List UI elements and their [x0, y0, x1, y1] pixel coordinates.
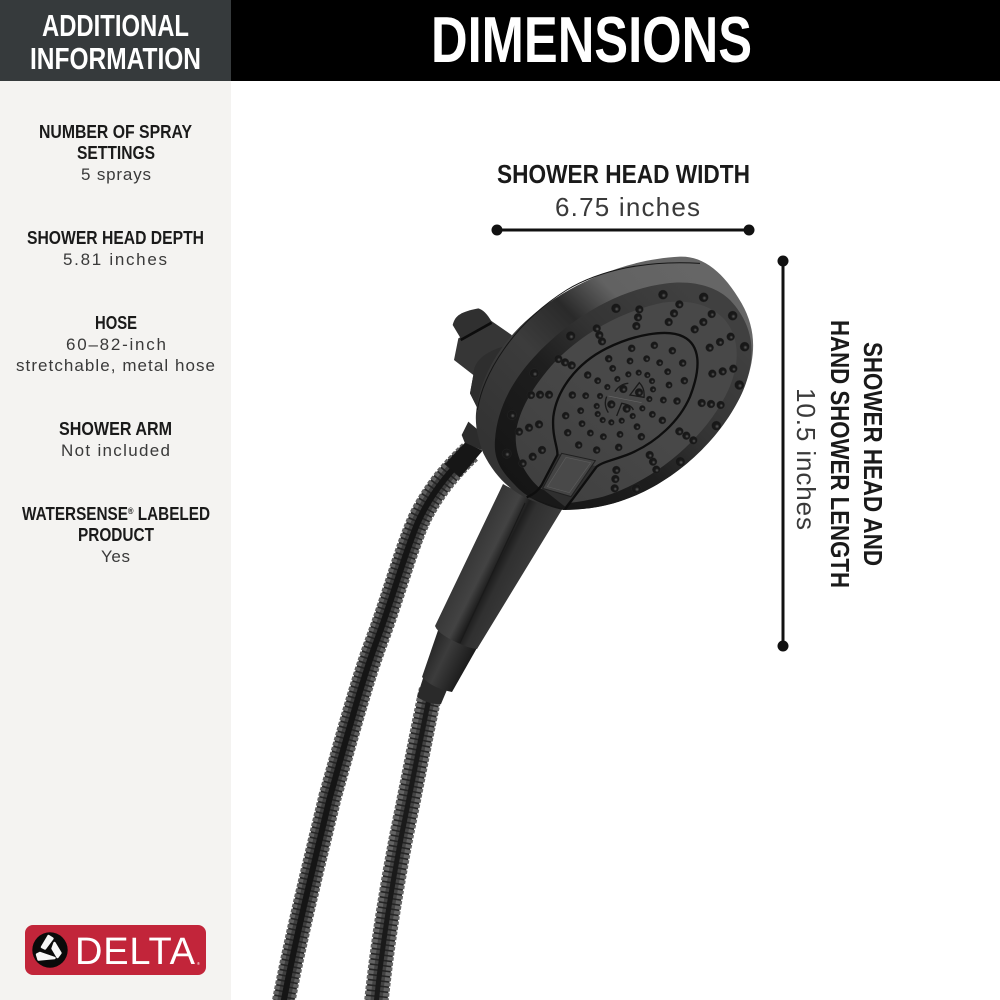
spec: watersense labeled product — [22, 504, 210, 566]
spec: number of spray settings: 5 sprays — [81, 165, 151, 184]
hose neck — [417, 672, 452, 704]
spec: shower head depth: SHOWER HEAD DEPTH — [27, 228, 204, 248]
label: shower head and hand shower length: SHOWER HEAD AND — [858, 342, 888, 566]
sidebar panel background — [0, 81, 231, 1000]
logo: delta — [25, 925, 206, 975]
center spray marks — [605, 383, 644, 416]
header: additional information — [0, 0, 231, 81]
dark face ring — [495, 282, 752, 510]
label: shower head width: 6.75 inches — [555, 192, 700, 222]
arrow: length dimension line — [778, 256, 788, 652]
illustration: shower head with hose — [283, 257, 753, 1000]
header: additional information: ADDITIONAL — [42, 8, 189, 43]
spec: number of spray settings: NUMBER OF SPRAY — [39, 122, 192, 142]
arrow: width dimension line — [492, 224, 754, 236]
spec: hose: HOSE — [95, 313, 137, 333]
mount connector — [445, 308, 517, 477]
label: shower head width: SHOWER HEAD WIDTH — [497, 159, 750, 189]
button — [543, 453, 595, 497]
spec: hose: 60–82-inch — [66, 335, 166, 354]
spray nozzles — [502, 290, 749, 493]
handle grip — [435, 484, 566, 649]
logo: delta: DELTA — [75, 931, 196, 973]
label: shower head and hand shower length: HAND SHOWER LENGTH — [825, 320, 855, 588]
spec: number of spray settings — [39, 122, 192, 184]
rim edge line — [477, 263, 700, 410]
header: additional information: INFORMATION — [30, 41, 201, 76]
button channel — [541, 453, 597, 507]
inner spray dial line — [527, 333, 698, 509]
header: dimensions title: DIMENSIONS — [431, 3, 752, 76]
label: shower head width — [497, 159, 750, 222]
grey spray face — [516, 302, 737, 503]
header: dimensions title — [231, 0, 1000, 81]
spec: watersense labeled product: ® — [128, 506, 134, 516]
hose: front run — [376, 690, 431, 1000]
spec: shower head depth — [27, 228, 204, 269]
label: shower head and hand shower length: 10.5 inches — [791, 388, 821, 530]
spec: watersense labeled product: PRODUCT — [78, 525, 154, 545]
hose: rear loop — [283, 452, 470, 1000]
logo: delta: ® — [197, 961, 200, 966]
spec: shower head depth: 5.81 inches — [63, 250, 167, 269]
spec: watersense labeled product: WATERSENSE — [22, 504, 147, 524]
spec: shower arm — [59, 419, 172, 460]
shower head detail, drawn in zoomed coordinates — [445, 257, 753, 510]
lower ring section — [527, 488, 573, 509]
spec: watersense labeled product: Yes — [101, 547, 130, 566]
handle collar — [422, 610, 490, 692]
spec: shower arm: SHOWER ARM — [59, 419, 172, 439]
label: shower head and hand shower length — [791, 320, 888, 588]
spec: shower arm: Not included — [61, 441, 170, 460]
spec: watersense labeled product: LABELED — [134, 504, 210, 524]
spec: number of spray settings: SETTINGS — [77, 143, 155, 163]
spec: hose — [16, 313, 215, 375]
spec: hose: stretchable, metal hose — [16, 356, 215, 375]
back rim — [476, 257, 753, 509]
